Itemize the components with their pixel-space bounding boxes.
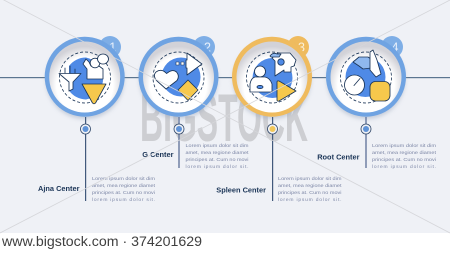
- text block 3: lorem ipsum dolor sit.: [278, 197, 342, 203]
- ring 3: [232, 37, 312, 119]
- label: Spleen Center: Spleen Center: [216, 186, 266, 194]
- text block 4: lorem ipsum dolor sit.: [372, 164, 436, 170]
- text block 2: lorem ipsum dolor sit.: [186, 164, 248, 170]
- timeline line: [0, 77, 450, 78]
- badge 4: 4: [392, 40, 399, 54]
- text block 2: Lorem ipsum dolor sit dim: [186, 143, 248, 149]
- text block 3: principes at. Cum no movi: [278, 190, 342, 196]
- text block 4: Lorem ipsum dolor sit dim: [372, 143, 436, 149]
- step 3: [232, 36, 312, 119]
- badge 3: 3: [298, 40, 305, 54]
- text block 1: [92, 176, 156, 203]
- text block 3: Lorem ipsum dolor sit dim: [278, 176, 342, 182]
- label: Ajna Center: Ajna Center: [38, 184, 80, 193]
- text block 1: amet, mea regione diamet: [92, 183, 156, 189]
- connector 1: [80, 117, 90, 201]
- connector 2: [174, 117, 184, 168]
- text block 2: amet, mea regione diamet: [186, 150, 249, 156]
- icon: hand, gauge and square: [340, 50, 392, 103]
- icon: heart, arrow and diamond: [153, 52, 204, 103]
- ring 2: [138, 37, 218, 119]
- step 2: [138, 36, 218, 119]
- text block 1: principes at. Cum no movi: [92, 190, 155, 196]
- text block 4: principes at. Cum no movi: [372, 157, 436, 163]
- connector 3: [268, 117, 278, 201]
- badge 2: 2: [204, 40, 211, 54]
- label: G Center: G Center: [142, 150, 174, 159]
- text block 3: amet, mea regione diamet: [278, 183, 342, 189]
- text block 2: principes at. Cum no movi: [186, 157, 248, 163]
- label: Root Center: Root Center: [317, 152, 360, 162]
- ring 4: [326, 37, 406, 119]
- icon: funnel, person and triangle: [59, 52, 110, 104]
- connector 4: [361, 117, 371, 168]
- text block 4: amet, mea regione diamet: [372, 150, 437, 156]
- text block 2: [186, 143, 249, 170]
- ring 1: [45, 37, 125, 119]
- icon: person, head and play triangle: [246, 52, 298, 103]
- text block 1: Lorem ipsum dolor sit dim: [92, 176, 155, 182]
- text block 1: lorem ipsum dolor sit.: [92, 197, 155, 203]
- footer source text: www.bigstock.com · 374201629: [1, 234, 202, 249]
- text block 4: [372, 143, 437, 170]
- badge 1: 1: [109, 40, 116, 54]
- text block 3: [278, 176, 342, 203]
- step 4: [326, 36, 406, 119]
- step 1: [45, 36, 125, 119]
